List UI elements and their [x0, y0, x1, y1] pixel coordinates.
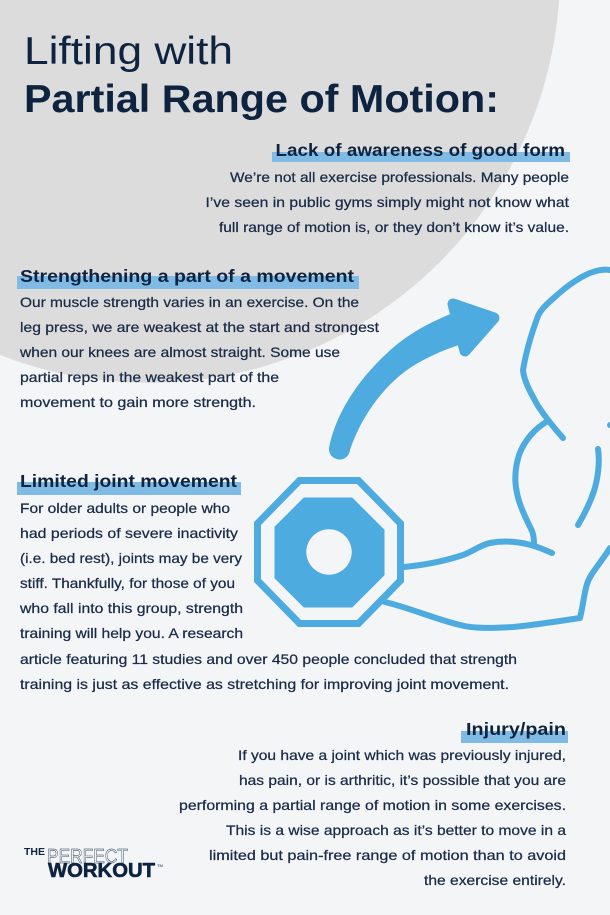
body text: (i.e. bed rest), joints may be very	[20, 550, 242, 566]
logo: The Perfect Workout: THE	[24, 847, 45, 858]
body text: training is just as effective as stretching for improving joint movement.	[20, 676, 509, 692]
body text: had periods of severe inactivity	[20, 525, 238, 541]
body text: stiff. Thankfully, for those of you	[20, 575, 235, 591]
body text: the exercise entirely.	[424, 872, 566, 888]
icon: flexed arm outline	[385, 270, 610, 628]
heading: Limited joint movement	[20, 471, 237, 491]
title	[24, 30, 499, 121]
panel: strengthening a part of a movement	[17, 266, 379, 410]
body text	[206, 169, 569, 235]
logo: The Perfect Workout: TM	[157, 863, 163, 868]
body text: when our knees are almost straight. Some use	[19, 344, 340, 360]
heading highlight	[272, 152, 570, 162]
body text: For older adults or people who	[20, 500, 230, 516]
body text: limited but pain-free range of motion than to avoid	[209, 847, 566, 863]
body text: We’re not all exercise professionals. Many people	[230, 169, 569, 185]
body text: I’ve seen in public gyms simply might not know what	[206, 194, 569, 210]
chest line	[578, 449, 599, 525]
icon: weight plate	[258, 480, 400, 624]
title: Lifting with	[24, 30, 233, 73]
body text: leg press, we are weakest at the start and strongest	[20, 319, 379, 335]
logo: The Perfect Workout	[24, 846, 163, 882]
body text: performing a partial range of motion in some exercises.	[179, 797, 566, 813]
forearm upper line	[404, 542, 552, 567]
body text: movement to gain more strength.	[20, 394, 256, 410]
body text: who fall into this group, strength	[19, 600, 243, 616]
forearm lower and torso line	[385, 548, 610, 628]
body text: training will help you. A research	[20, 625, 243, 641]
icon: curved arrow	[329, 304, 494, 460]
body text	[19, 294, 379, 410]
heading highlight	[17, 276, 359, 289]
body text: If you have a joint which was previously injured,	[238, 747, 566, 763]
panel: lack of awareness	[206, 140, 570, 235]
panel: injury/pain	[179, 719, 568, 888]
logo: The Perfect Workout: PERFECT	[47, 846, 128, 868]
logo: The Perfect Workout: WORKOUT	[48, 860, 155, 882]
grey background circle	[0, 0, 560, 383]
title: Partial Range of Motion:	[24, 78, 499, 121]
heading: Lack of awareness of good form	[276, 140, 565, 160]
body text: article featuring 11 studies and over 450 people concluded that strength	[20, 651, 517, 667]
heading highlight	[17, 482, 241, 495]
panel: limited joint movement	[17, 471, 517, 692]
shoulder and upper arm line	[523, 270, 610, 438]
body text	[179, 747, 566, 888]
heading highlight	[461, 731, 568, 743]
body text: full range of motion is, or they don’t know it’s value.	[219, 219, 569, 235]
edge mark	[607, 422, 610, 428]
body text: partial reps in the weakest part of the	[20, 369, 279, 385]
heading: Injury/pain	[466, 719, 566, 739]
heading: Strengthening a part of a movement	[20, 266, 354, 286]
body text	[19, 500, 517, 692]
body text: This is a wise approach as it’s better to move in a	[226, 822, 566, 838]
biceps line	[515, 421, 548, 544]
body text: Our muscle strength varies in an exercise. On the	[20, 294, 359, 310]
body text: has pain, or is arthritic, it’s possible that you are	[239, 772, 566, 788]
